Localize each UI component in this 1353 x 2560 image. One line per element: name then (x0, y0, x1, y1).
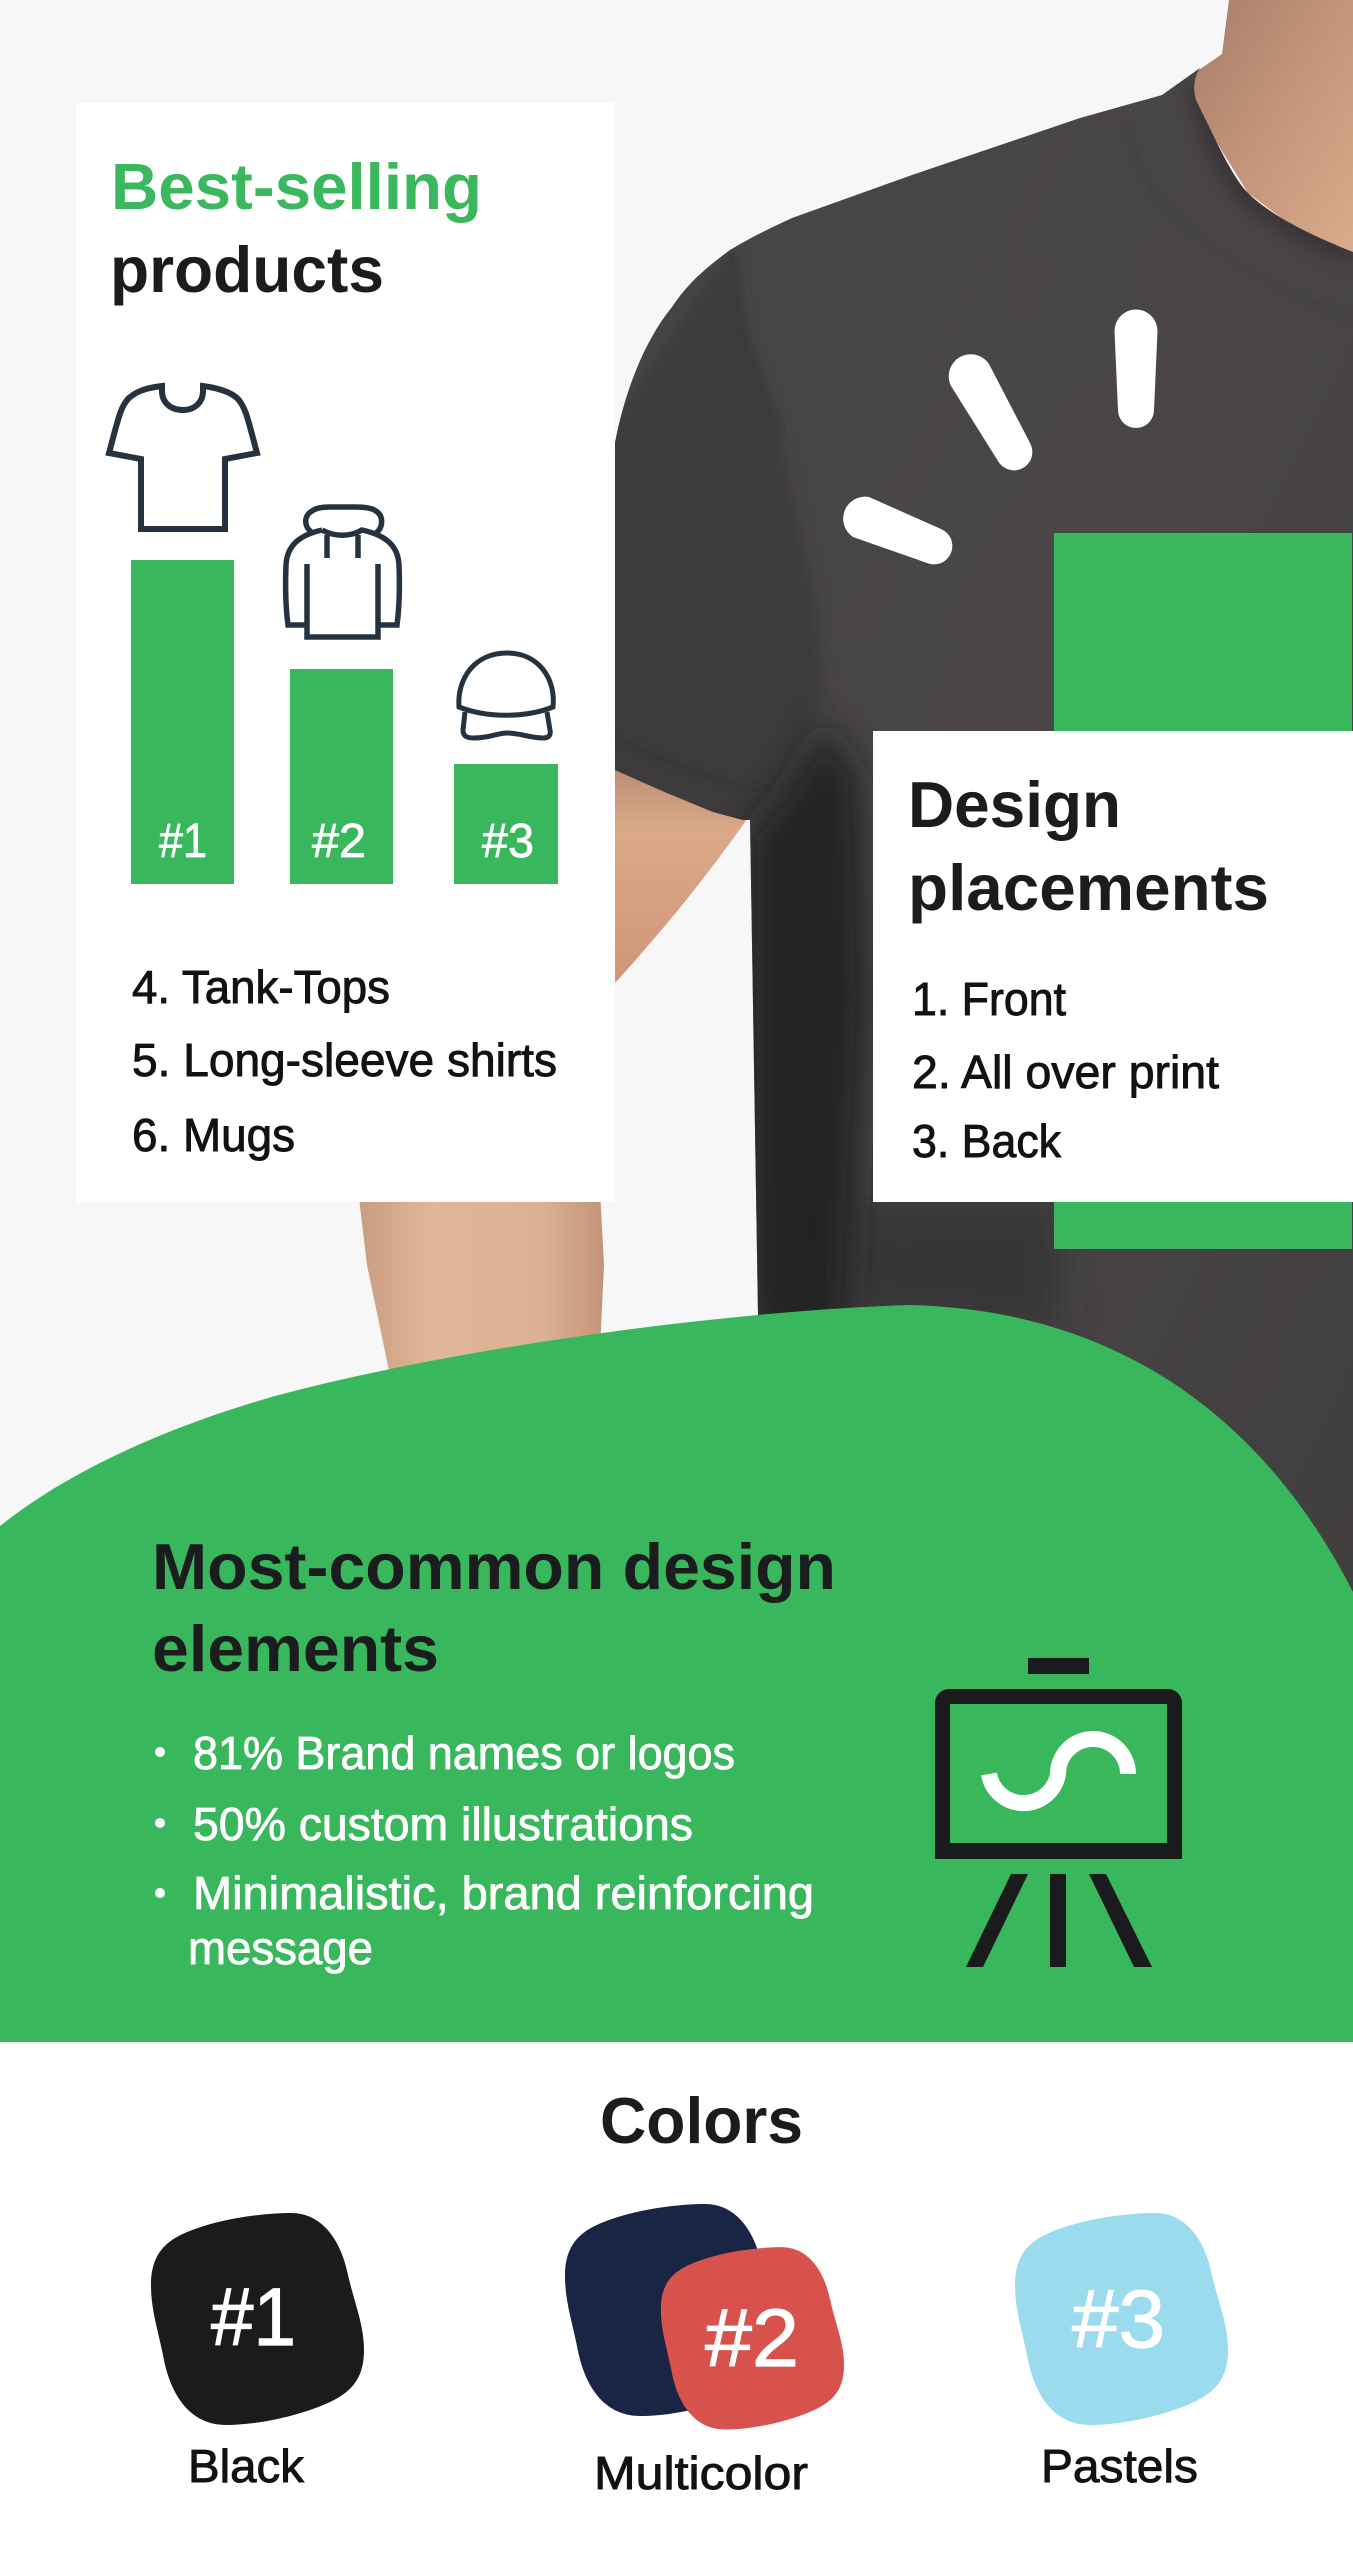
bullet list (155, 1727, 814, 1974)
heading: best-selling products: products (110, 233, 384, 306)
bullet list: 50% custom illustrations (193, 1798, 693, 1850)
heading: best-selling products (110, 150, 482, 306)
icon: t-shirt (109, 386, 257, 529)
bullet list: Minimalistic, brand reinforcing (193, 1867, 814, 1919)
swatch: pastels: Pastels (1041, 2440, 1198, 2492)
bar: #2 (290, 669, 393, 884)
heading: most-common design elements: Most-common design (152, 1530, 836, 1603)
list: placements (912, 973, 1219, 1167)
swatch: multicolor: Multicolor (594, 2447, 808, 2499)
list: placements: 1. Front (912, 973, 1066, 1025)
heading: design placements: Design (908, 768, 1121, 841)
icon: hoodie (286, 507, 399, 637)
bar: #1: #1 (159, 815, 207, 868)
icon: cap (459, 653, 553, 738)
swatch: black (151, 2213, 364, 2492)
photo: man wearing dark t-shirt (358, 0, 1353, 1620)
swatch: black: #1 (211, 2272, 296, 2363)
list: placements: 3. Back (912, 1115, 1062, 1167)
heading: most-common design elements (152, 1530, 836, 1685)
bar: #3: #3 (482, 815, 534, 868)
green placement rectangle (1054, 533, 1352, 1249)
heading: design placements: placements (908, 851, 1269, 924)
panel: design placements (873, 731, 1353, 1202)
panel: most-common design elements (0, 1305, 1353, 2042)
heading: most-common design elements: elements (152, 1612, 439, 1685)
bar chart: top products (131, 560, 558, 884)
panel: colors (0, 2042, 1353, 2560)
icon: easel with canvas (935, 1658, 1182, 1967)
list: other products (132, 961, 557, 1161)
heading: best-selling products: Best-selling (111, 150, 482, 223)
panel: best-selling products (76, 103, 615, 1202)
bar: #1 (131, 560, 234, 884)
swatch: pastels (1015, 2213, 1228, 2492)
list: other products: 5. Long-sleeve shirts (132, 1034, 557, 1086)
design placement spark lines (843, 310, 1158, 564)
heading: colors: Colors (600, 2084, 803, 2157)
heading: design placements (908, 768, 1269, 924)
list: other products: 4. Tank-Tops (132, 961, 390, 1013)
list: placements: 2. All over print (912, 1046, 1219, 1098)
bullet list: 81% Brand names or logos (193, 1727, 735, 1779)
swatch: multicolor: #2 (705, 2293, 799, 2384)
list: other products: 6. Mugs (132, 1109, 295, 1161)
bullet list: message (188, 1922, 373, 1974)
bar: #3 (454, 764, 558, 884)
swatch: pastels: #3 (1072, 2274, 1165, 2365)
swatch: black: Black (188, 2440, 305, 2492)
swatch: multicolor (565, 2204, 844, 2499)
bar: #2: #2 (312, 815, 366, 868)
